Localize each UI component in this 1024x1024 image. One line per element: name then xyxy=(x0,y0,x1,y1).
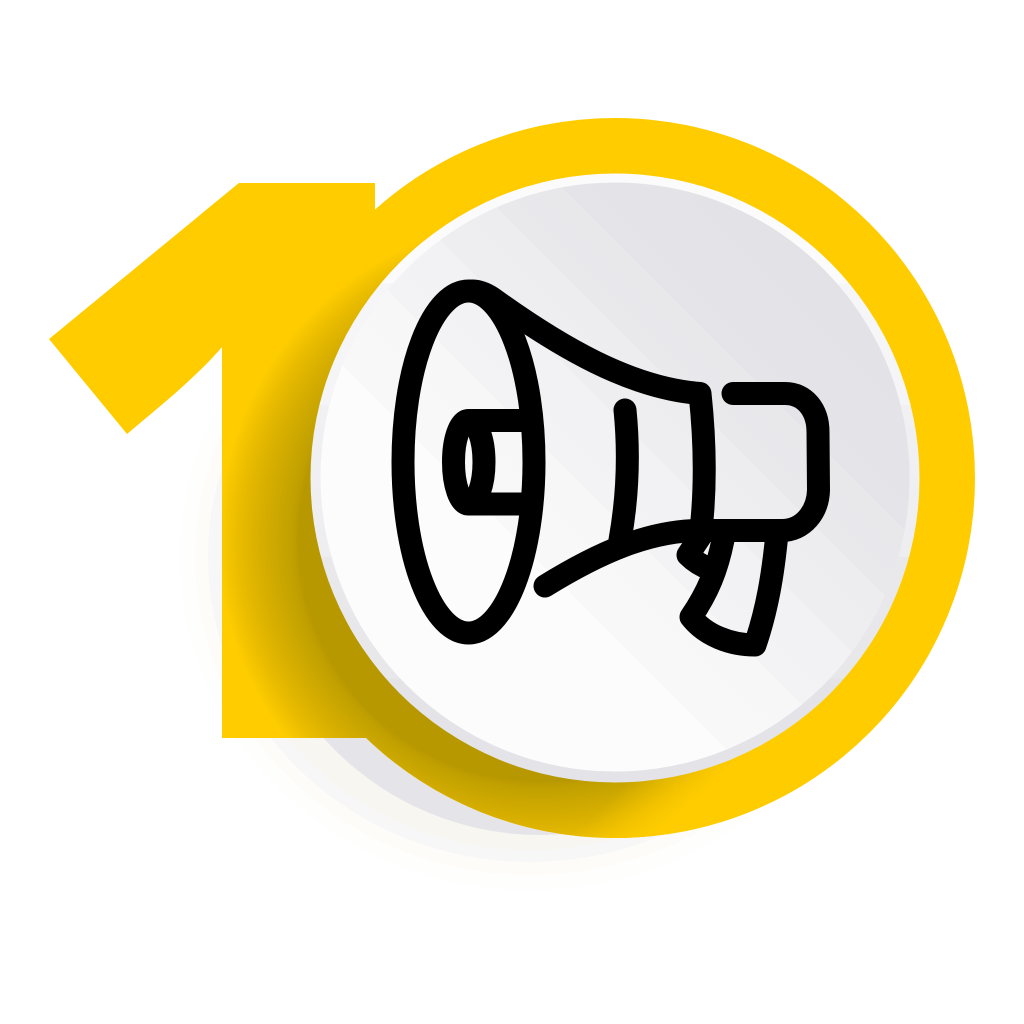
megaphone inner line xyxy=(620,410,627,540)
icon: megaphone xyxy=(403,291,818,645)
megaphone handle xyxy=(691,533,777,645)
soft drop shadow under badge xyxy=(180,224,880,890)
gold cast shadow on yellow xyxy=(200,170,932,838)
megaphone bell rim xyxy=(403,291,534,633)
megaphone inner cylinder xyxy=(454,420,525,504)
numeral one and yellow ring xyxy=(49,118,975,838)
badge graphic xyxy=(49,118,975,850)
megaphone horn top edge xyxy=(472,291,704,530)
megaphone trigger xyxy=(688,537,710,569)
white disc xyxy=(310,174,920,782)
megaphone horn lower edge and body xyxy=(545,394,818,586)
